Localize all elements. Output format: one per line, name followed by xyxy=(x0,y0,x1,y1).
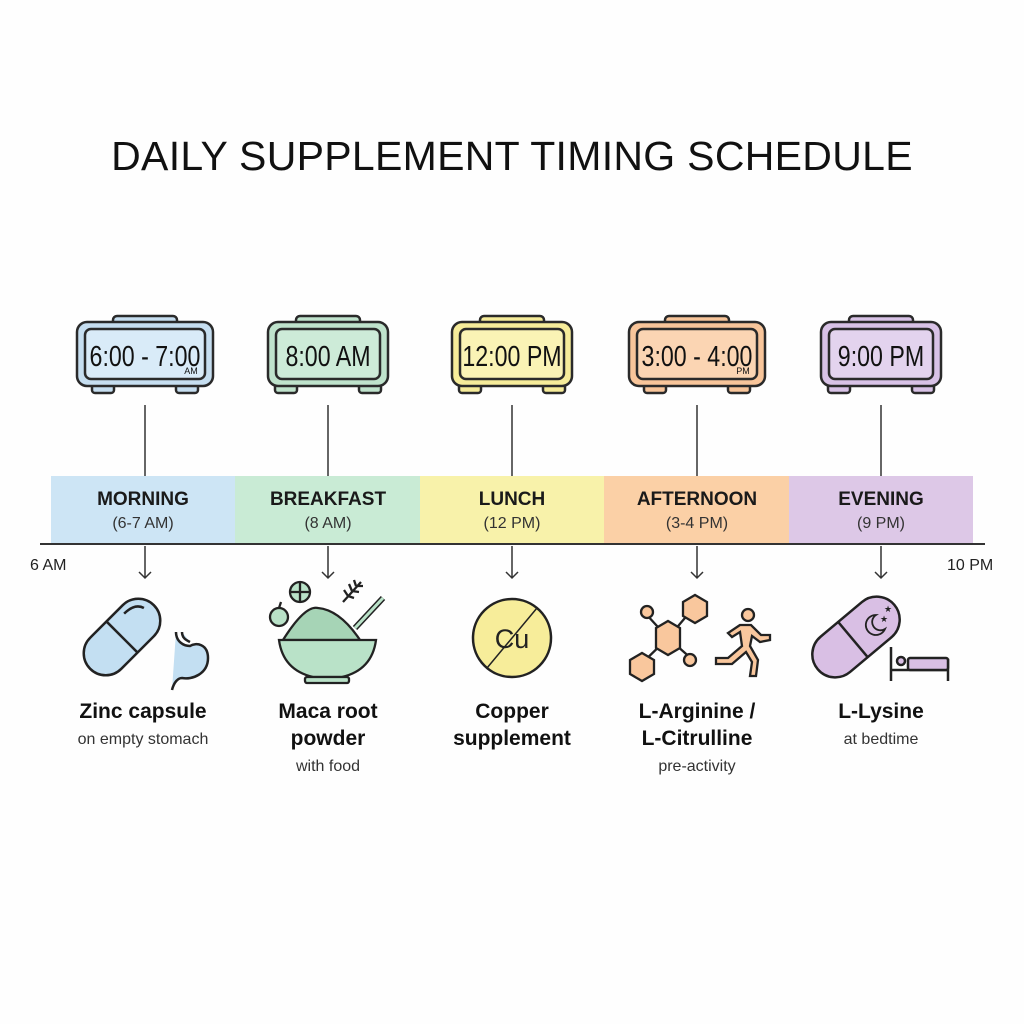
clock: breakfast: 8:00 AM xyxy=(285,339,371,373)
caption: copper xyxy=(453,700,571,750)
caption: copper: supplement xyxy=(453,727,571,750)
caption: lysine xyxy=(838,700,924,748)
clock: afternoon: 3:00 - 4:00 xyxy=(642,339,752,373)
clock: evening: 9:00 PM xyxy=(838,339,924,373)
caption: arginine xyxy=(639,700,755,775)
timeline bar: (9 PM) xyxy=(857,515,905,532)
caption: lysine: at bedtime xyxy=(844,731,918,748)
icon: maca bowl xyxy=(270,580,383,683)
timeline bar xyxy=(40,476,985,544)
clock: morning: 6:00 - 7:00 xyxy=(90,339,200,373)
icon: copper Cu: Cu xyxy=(495,624,529,654)
timeline bar: (8 AM) xyxy=(304,515,352,532)
axis labels: 10 PM xyxy=(947,557,993,574)
clock: morning xyxy=(77,316,213,393)
caption: maca xyxy=(278,700,378,775)
timeline bar: AFTERNOON xyxy=(637,489,757,510)
timeline bar: (6-7 AM) xyxy=(112,515,174,532)
timeline bar: EVENING xyxy=(838,489,924,510)
clock: lunch xyxy=(452,316,572,393)
caption: maca: powder xyxy=(291,727,365,750)
clock: breakfast xyxy=(268,316,388,393)
connector lines xyxy=(145,405,881,476)
title: DAILY SUPPLEMENT TIMING SCHEDULE xyxy=(111,133,913,179)
icon: zinc capsule and stomach xyxy=(75,590,208,690)
icon: lysine capsule with moon and bed xyxy=(803,587,948,687)
caption: zinc xyxy=(78,700,208,748)
clock: morning: AM xyxy=(184,366,198,376)
caption: zinc: on empty stomach xyxy=(78,731,208,748)
clock: lunch: 12:00 PM xyxy=(462,339,562,373)
timeline bar: LUNCH xyxy=(479,489,545,510)
caption: copper: Copper xyxy=(475,700,549,723)
axis labels xyxy=(30,557,993,574)
axis labels: 6 AM xyxy=(30,557,66,574)
clock: afternoon: PM xyxy=(736,366,750,376)
icon: lysine capsule with moon and bed: ★ xyxy=(880,614,888,624)
caption: maca: with food xyxy=(295,758,360,775)
timeline bar: MORNING xyxy=(97,489,189,510)
caption: maca: Maca root xyxy=(278,700,378,723)
icon: lysine capsule with moon and bed: ★ xyxy=(884,604,892,614)
caption: arginine: L-Arginine / xyxy=(639,700,755,723)
arrows down xyxy=(139,546,887,578)
timeline bar: BREAKFAST xyxy=(270,489,386,510)
icon: molecule and runner xyxy=(630,595,770,681)
timeline bar: (3-4 PM) xyxy=(666,515,728,532)
icon: copper Cu xyxy=(473,599,551,677)
clock: evening xyxy=(821,316,941,393)
timeline bar: (12 PM) xyxy=(484,515,540,532)
caption: arginine: L-Citrulline xyxy=(642,727,752,750)
clock: afternoon xyxy=(629,316,765,393)
caption: lysine: L-Lysine xyxy=(838,700,924,723)
caption: arginine: pre-activity xyxy=(658,758,736,775)
caption: zinc: Zinc capsule xyxy=(79,700,207,723)
